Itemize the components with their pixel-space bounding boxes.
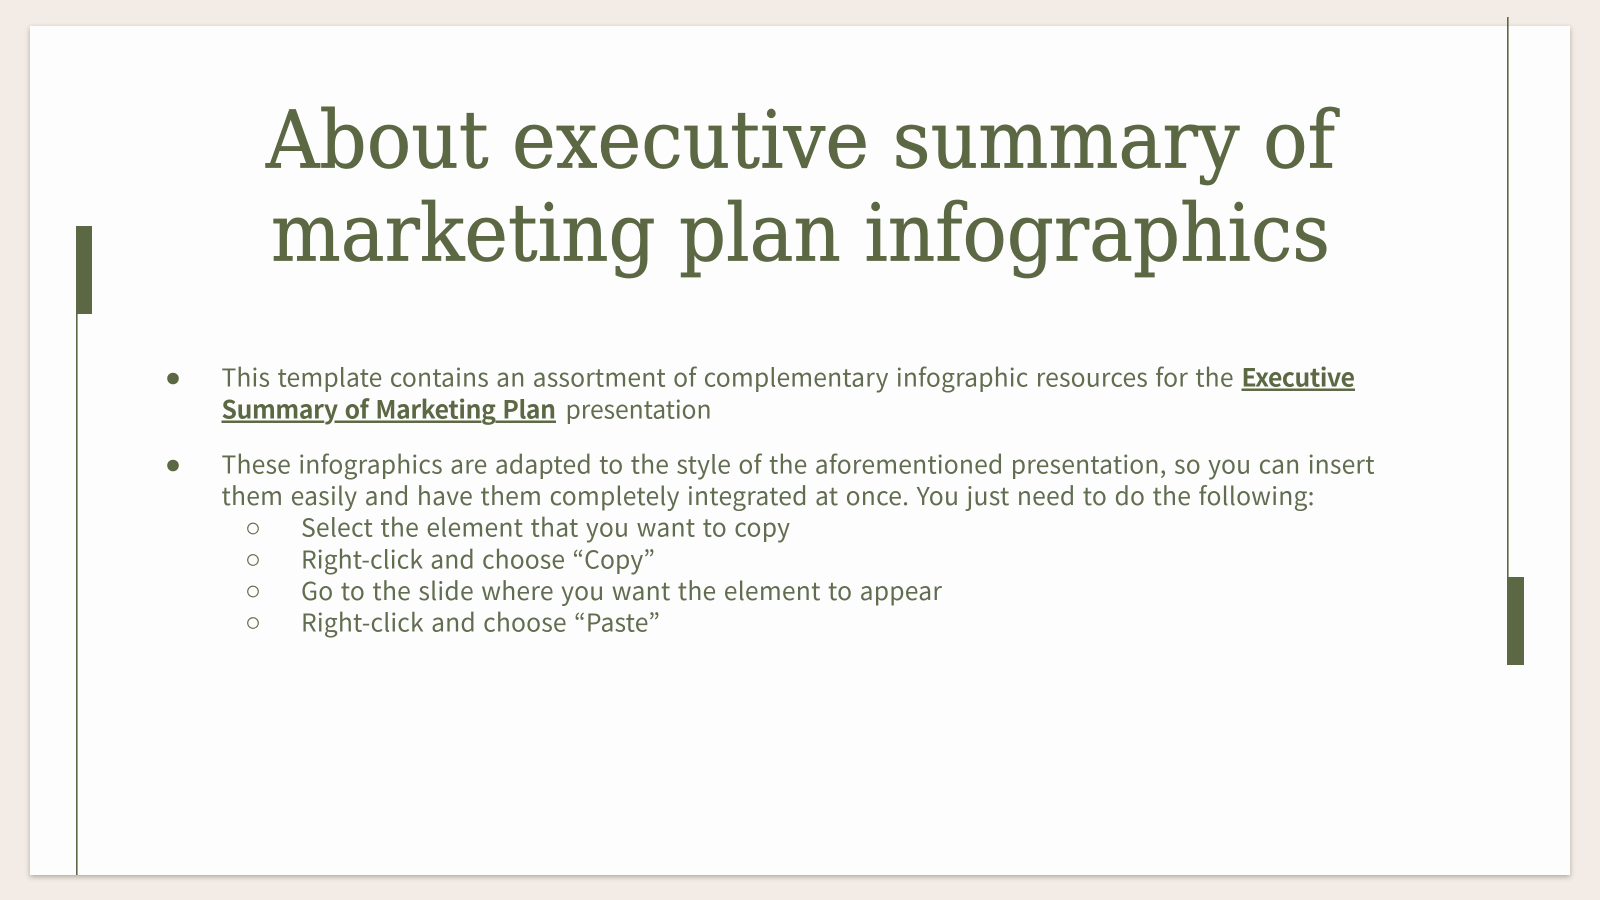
title: marketing plan infographics (271, 186, 1330, 280)
bullet 1: template description: This template contains an assortment of complementary infographic resources for the (222, 358, 1234, 394)
bullet 1: template description: presentation (566, 390, 712, 426)
sub-list: copy and paste steps (248, 508, 942, 640)
bullet 2: usage description: them easily and have them completely integrated at once. You just need to do the following: (222, 477, 1314, 513)
bullet 1: template description: Executive (1242, 358, 1355, 394)
bullet 2: usage description: These infographics are adapted to the style of the aforementioned presentation, so you can insert (222, 446, 1374, 482)
sub-list: copy and paste steps: Go to the slide where you want the element to appear (301, 572, 942, 608)
bullet 2: usage description (167, 446, 1375, 513)
sub-list: copy and paste steps: Right-click and choose “Copy” (301, 540, 655, 576)
left accent: bar and line (76, 226, 92, 875)
bullet 1: template description (167, 358, 1355, 426)
sub-list: copy and paste steps: Right-click and choose “Paste” (301, 604, 660, 640)
sub-list: copy and paste steps: Select the element that you want to copy (301, 508, 790, 544)
title: About executive summary of (265, 94, 1340, 186)
bullet 1: template description: Summary of Marketing Plan (222, 390, 556, 426)
title (265, 94, 1340, 280)
right accent: line and bar (1507, 17, 1524, 665)
